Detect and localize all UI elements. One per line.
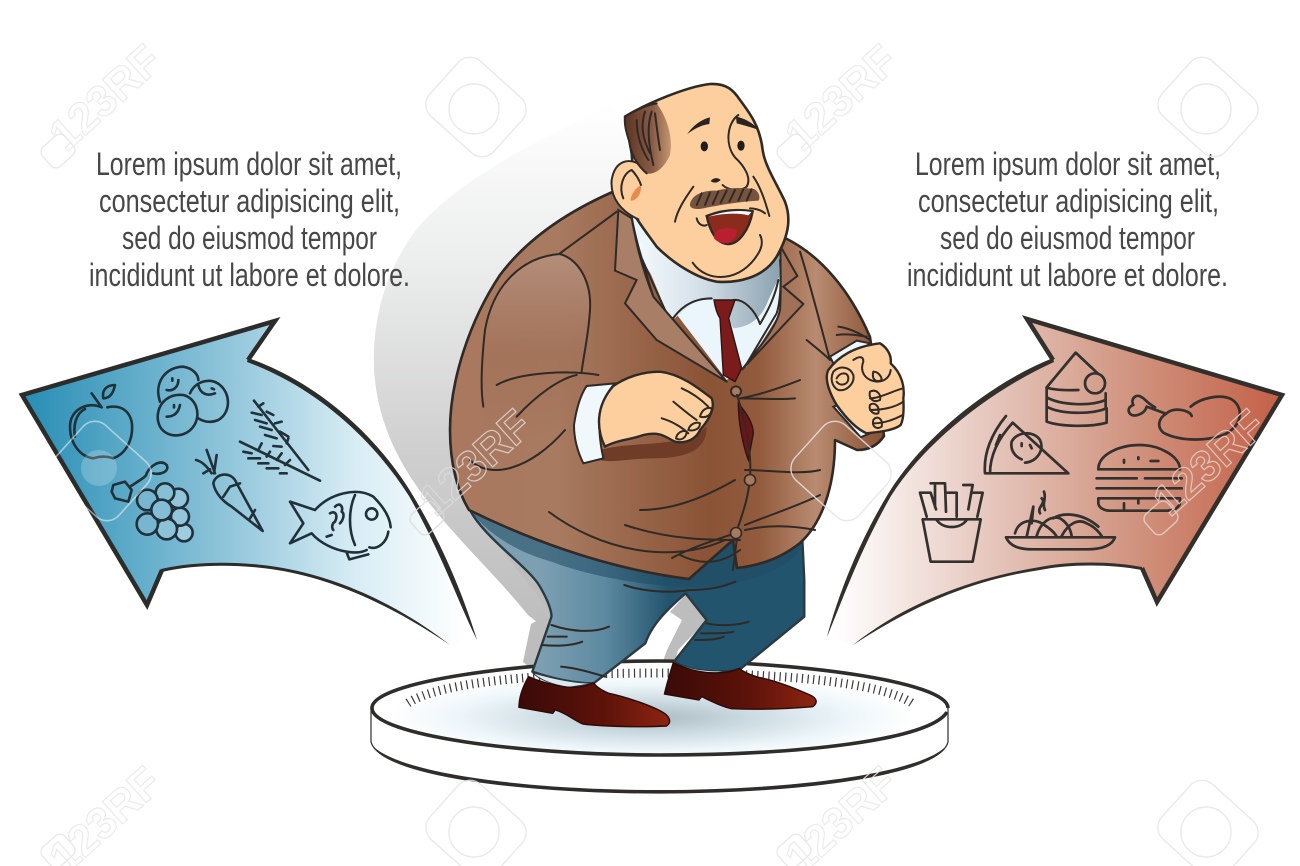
eyes xyxy=(701,141,708,151)
nose xyxy=(723,115,748,190)
icon: pasta plate xyxy=(1006,492,1115,549)
right cuff xyxy=(830,341,870,437)
left hand xyxy=(599,372,713,447)
icon: fish xyxy=(290,492,391,559)
right shoe xyxy=(664,663,816,709)
right text block: sed do eiusmod tempor xyxy=(940,220,1195,256)
icon: grapes xyxy=(112,463,193,541)
left text block: Lorem ipsum dolor sit amet, xyxy=(96,146,402,182)
icon: burger xyxy=(1097,445,1182,511)
backdrop shadow behind figure xyxy=(374,104,707,690)
middle button xyxy=(744,474,756,486)
left text block: sed do eiusmod tempor xyxy=(122,220,377,256)
watermark stamps: 123RF xyxy=(1144,401,1275,525)
icon: berries xyxy=(158,367,228,435)
wrinkles xyxy=(740,252,870,399)
icon: apple xyxy=(70,385,132,458)
right text block xyxy=(907,146,1228,293)
panel: healthy food arrow xyxy=(22,321,477,645)
right lapel xyxy=(742,247,803,370)
sleeve xyxy=(482,254,590,437)
icon: carrot xyxy=(196,450,263,531)
right text block: consectetur adipisicing elit, xyxy=(918,183,1219,219)
unhealthy food icons xyxy=(920,353,1240,562)
left cuff xyxy=(574,383,615,463)
lower necktie xyxy=(738,403,753,460)
necktie xyxy=(714,300,742,382)
left shoe xyxy=(519,677,670,727)
left lapel xyxy=(615,210,727,382)
face lines xyxy=(675,177,769,277)
platform scale xyxy=(371,660,948,793)
jacket xyxy=(450,190,884,579)
hand shadow xyxy=(600,427,707,461)
moustache xyxy=(690,188,759,209)
mouth xyxy=(707,210,753,244)
left sock xyxy=(532,673,594,687)
icon: cake xyxy=(1047,353,1107,426)
left text block xyxy=(89,146,410,293)
nostril xyxy=(711,178,721,183)
jacket lower wrinkles xyxy=(470,395,820,570)
left text block: consectetur adipisicing elit, xyxy=(99,183,400,219)
icon: herb sprigs xyxy=(240,401,320,481)
watermark stamps: 123RF xyxy=(40,36,171,160)
healthy food icons xyxy=(70,367,391,559)
trousers xyxy=(469,508,816,727)
neck shadow xyxy=(637,240,779,328)
eyebrows xyxy=(687,117,759,134)
watermark stamps: 123RF xyxy=(410,401,541,525)
collar and shirt edges xyxy=(632,217,781,382)
panel: unhealthy food arrow xyxy=(827,319,1282,645)
character: businessman xyxy=(450,84,904,727)
icon: french fries xyxy=(920,483,983,562)
ear xyxy=(612,161,653,219)
shirt xyxy=(631,217,782,380)
right hand xyxy=(827,343,904,433)
icon: chicken leg xyxy=(1129,396,1240,440)
watermark stamps: 123RF xyxy=(776,36,907,160)
bottom button xyxy=(730,528,742,538)
right sock xyxy=(675,662,728,673)
right text block: Lorem ipsum dolor sit amet, xyxy=(915,146,1221,182)
left text block: incididunt ut labore et dolore. xyxy=(89,257,410,293)
icon: pizza slice xyxy=(985,416,1068,473)
head xyxy=(625,84,788,282)
top button xyxy=(731,386,741,396)
hair xyxy=(625,103,671,174)
upper body details xyxy=(482,84,904,463)
